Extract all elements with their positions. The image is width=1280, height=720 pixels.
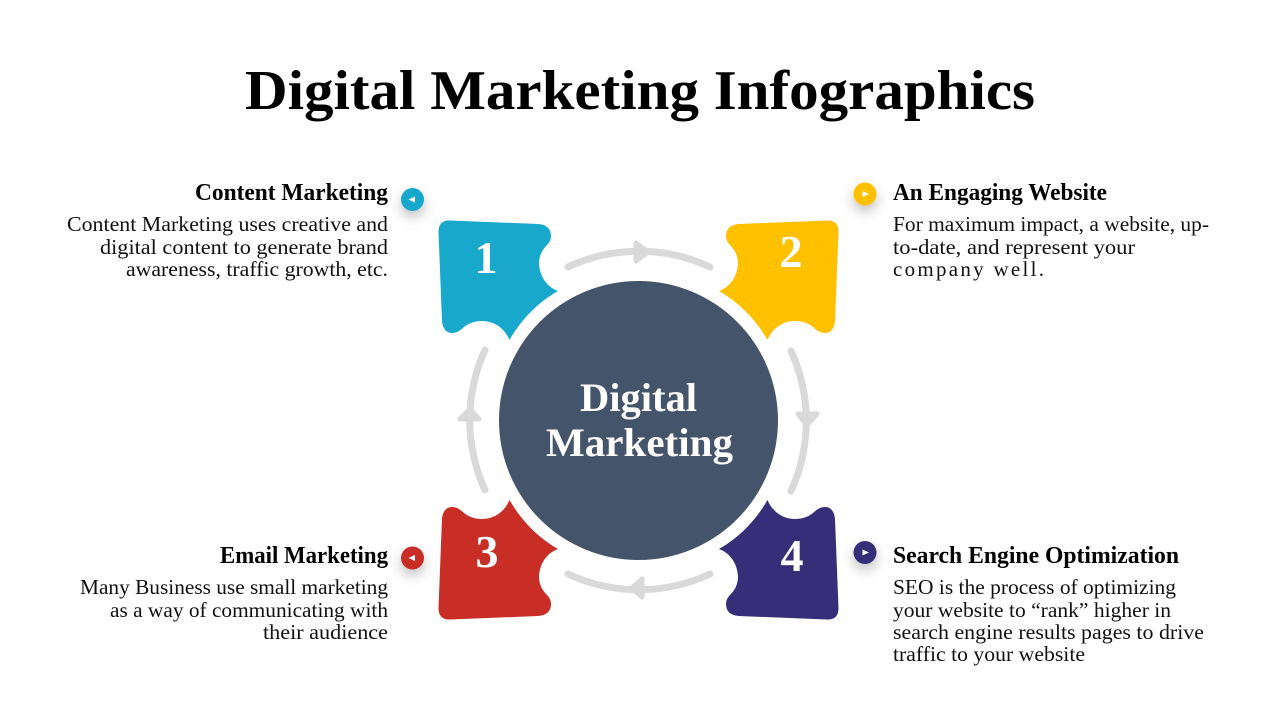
description: digital content to generate brand [100,235,389,259]
central circle [499,281,778,560]
marker dot 3 [401,546,424,570]
text block: Search Engine Optimization [893,543,1204,666]
arrow: left [460,350,485,490]
number 4: 4 [780,530,804,581]
text block: Email Marketing [80,543,389,644]
text block: Content Marketing [67,180,389,281]
heading: Content Marketing [195,180,388,206]
description: to-date, and represent your [893,235,1135,259]
marker dot 2 [854,182,876,206]
number 2: 2 [780,226,802,277]
arrow: bottom [568,574,710,597]
heading: An Engaging Website [893,180,1107,206]
marker dot 1 [401,188,424,211]
description: as a way of communicating with [110,598,389,622]
marker dot 4 [854,541,876,564]
description: For maximum impact, a website, up- [893,212,1209,236]
description: search engine results pages to drive [893,620,1204,644]
puzzle piece 4 [719,500,838,620]
description: traffic to your website [893,642,1085,666]
heading: Search Engine Optimization [893,543,1179,569]
circle label: Digital [580,375,697,420]
arrow: top [568,243,710,267]
puzzle piece 1 [438,220,558,340]
puzzle piece 2 [719,220,838,340]
description: company well. [893,257,1044,281]
description: Many Business use small marketing [80,575,388,599]
text block: An Engaging Website [893,180,1209,281]
heading: Email Marketing [220,543,388,569]
puzzle piece 3 [438,500,558,620]
description: your website to “rank” higher in [893,598,1172,622]
description: their audience [263,620,388,644]
arrow: right [791,351,817,491]
number 1: 1 [474,232,498,283]
description: SEO is the process of optimizing [893,575,1176,599]
description: awareness, traffic growth, etc. [126,257,388,281]
description: Content Marketing uses creative and [67,212,389,236]
number 3: 3 [476,526,498,577]
circle label: Marketing [546,420,733,465]
title: Digital Marketing Infographics [245,60,1035,122]
